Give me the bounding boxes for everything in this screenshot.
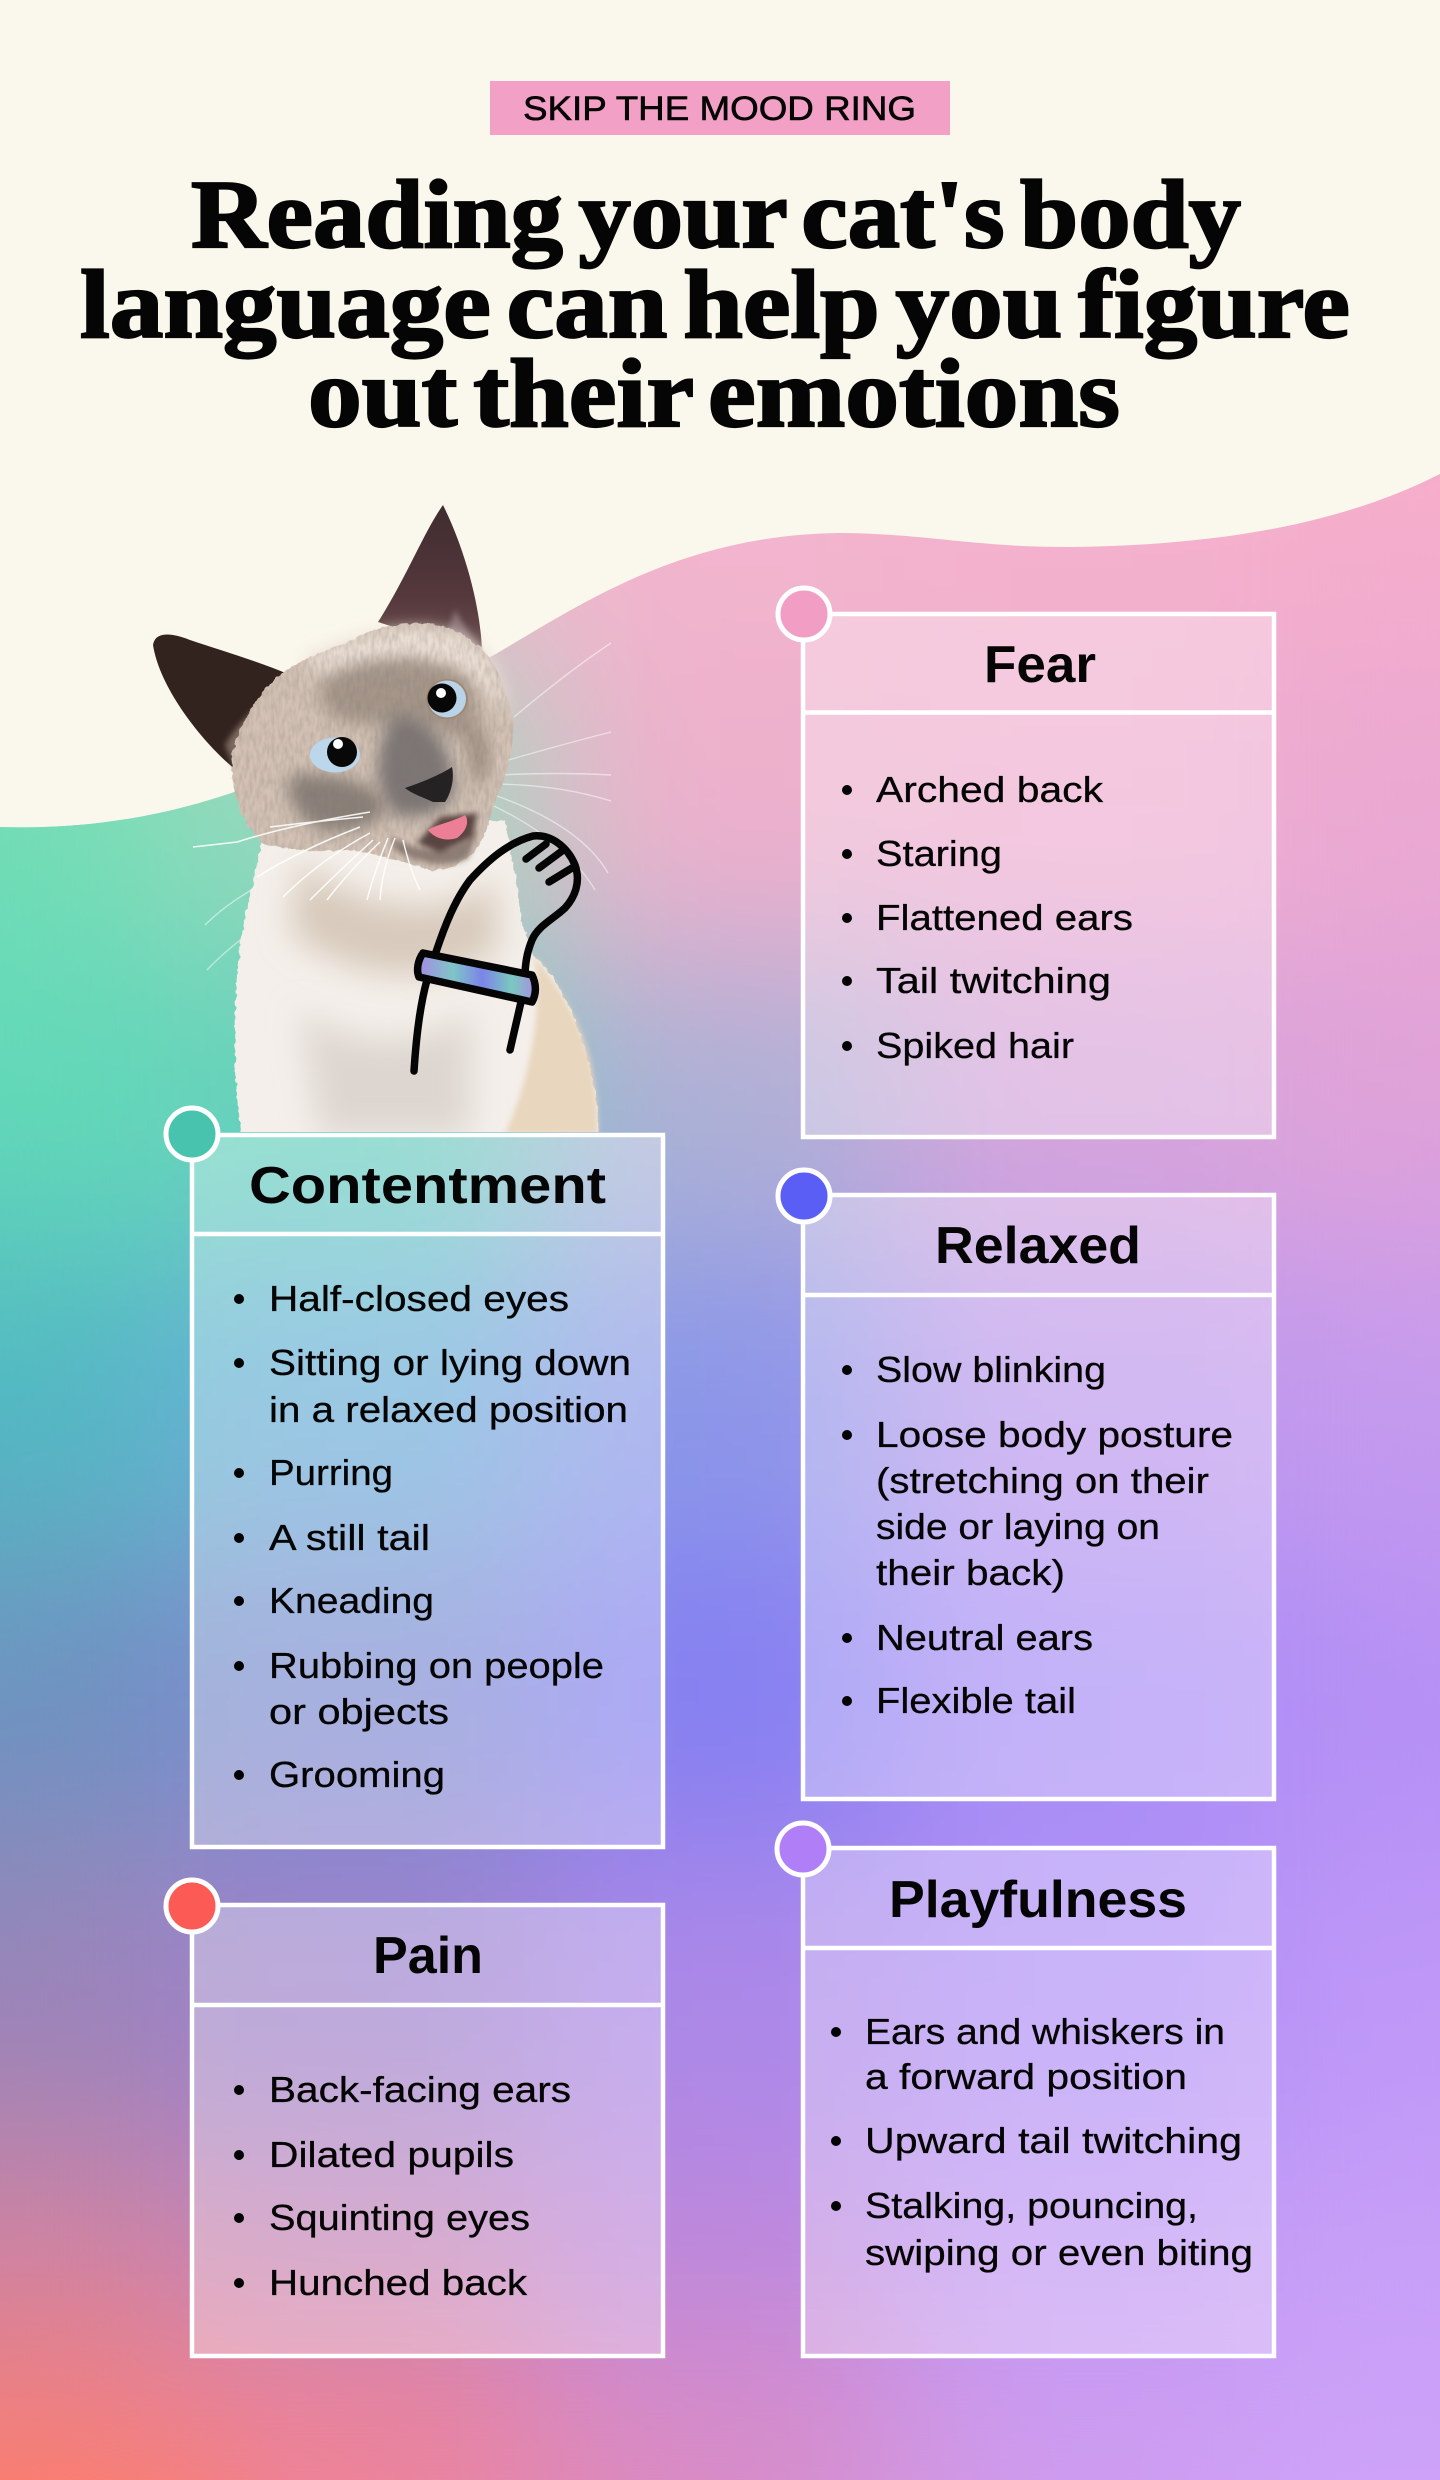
eyebrow tag bbox=[490, 81, 950, 135]
fear card box bbox=[803, 614, 1274, 1137]
contentment heading: Contentment bbox=[249, 1157, 606, 1215]
pain list: Dilated pupils bbox=[269, 2134, 514, 2175]
playfulness list: Stalking, pouncing, bbox=[865, 2185, 1198, 2226]
cat mouth and tongue bbox=[417, 813, 477, 853]
illustration: siamese cat bbox=[153, 505, 611, 1134]
contentment list: or objects bbox=[269, 1691, 449, 1732]
relaxed list: Slow blinking bbox=[876, 1349, 1106, 1390]
contentment marker bbox=[166, 1108, 218, 1160]
pain list: Back-facing ears bbox=[269, 2069, 571, 2110]
cat whiskers front bbox=[193, 812, 420, 900]
title: Reading your cat's body bbox=[191, 161, 1241, 269]
playfulness list: a forward position bbox=[865, 2056, 1187, 2097]
contentment list: Grooming bbox=[269, 1754, 445, 1795]
playfulness card box bbox=[803, 1848, 1274, 2356]
title: language can help you figure bbox=[80, 251, 1350, 359]
fear heading: Fear bbox=[984, 636, 1096, 694]
panel: relaxed bbox=[778, 1170, 1274, 1799]
panel: pain bbox=[166, 1880, 663, 2356]
contentment list: Half-closed eyes bbox=[269, 1278, 569, 1319]
contentment list: in a relaxed position bbox=[269, 1389, 628, 1430]
playfulness list: Upward tail twitching bbox=[865, 2120, 1242, 2161]
contentment list: Rubbing on people bbox=[269, 1645, 604, 1686]
playfulness list: swiping or even biting bbox=[865, 2232, 1253, 2273]
panel: contentment bbox=[166, 1108, 663, 1847]
title: out their emotions bbox=[308, 340, 1120, 448]
contentment card box bbox=[192, 1135, 663, 1847]
fear list: Flattened ears bbox=[876, 897, 1133, 938]
pain list: Hunched back bbox=[269, 2262, 528, 2303]
pain heading: Pain bbox=[373, 1927, 483, 1985]
fear list: Arched back bbox=[876, 769, 1104, 810]
fear list: Spiked hair bbox=[876, 1025, 1074, 1066]
pain card box bbox=[192, 1905, 663, 2356]
relaxed marker bbox=[778, 1170, 830, 1222]
panel: fear bbox=[778, 588, 1274, 1137]
relaxed list: their back) bbox=[876, 1552, 1065, 1593]
playfulness marker bbox=[777, 1823, 829, 1875]
cat head bbox=[232, 623, 513, 870]
relaxed list: Loose body posture bbox=[876, 1414, 1233, 1455]
eyebrow tag: SKIP THE MOOD RING bbox=[523, 90, 916, 128]
fear list: Staring bbox=[876, 833, 1002, 874]
icon: paw with mood ring bbox=[414, 836, 577, 1071]
contentment list: Purring bbox=[269, 1452, 393, 1493]
playfulness list: Ears and whiskers in bbox=[865, 2011, 1225, 2052]
cat ears bbox=[153, 505, 482, 770]
fear marker bbox=[778, 588, 830, 640]
cat body bbox=[235, 820, 598, 1134]
cat eyes bbox=[310, 679, 468, 772]
relaxed list: (stretching on their bbox=[876, 1460, 1209, 1501]
contentment list: Sitting or lying down bbox=[269, 1342, 631, 1383]
relaxed list: Neutral ears bbox=[876, 1617, 1093, 1658]
contentment list bbox=[234, 1278, 631, 1795]
relaxed list: Flexible tail bbox=[876, 1680, 1076, 1721]
playfulness heading: Playfulness bbox=[889, 1871, 1187, 1929]
pain list bbox=[234, 2069, 571, 2303]
contentment list: Kneading bbox=[269, 1580, 434, 1621]
relaxed list: side or laying on bbox=[876, 1506, 1160, 1547]
pain marker bbox=[166, 1880, 218, 1932]
relaxed heading: Relaxed bbox=[935, 1217, 1141, 1275]
contentment list: A still tail bbox=[269, 1517, 430, 1558]
pain list: Squinting eyes bbox=[269, 2197, 530, 2238]
relaxed list bbox=[842, 1349, 1233, 1721]
cat nose bbox=[405, 767, 453, 802]
panel: playfulness bbox=[777, 1823, 1274, 2356]
fear list bbox=[842, 769, 1133, 1066]
relaxed card box bbox=[803, 1195, 1274, 1799]
cat whiskers behind bbox=[205, 643, 611, 970]
playfulness list bbox=[831, 2011, 1253, 2273]
fear list: Tail twitching bbox=[876, 960, 1111, 1001]
title bbox=[80, 161, 1350, 448]
